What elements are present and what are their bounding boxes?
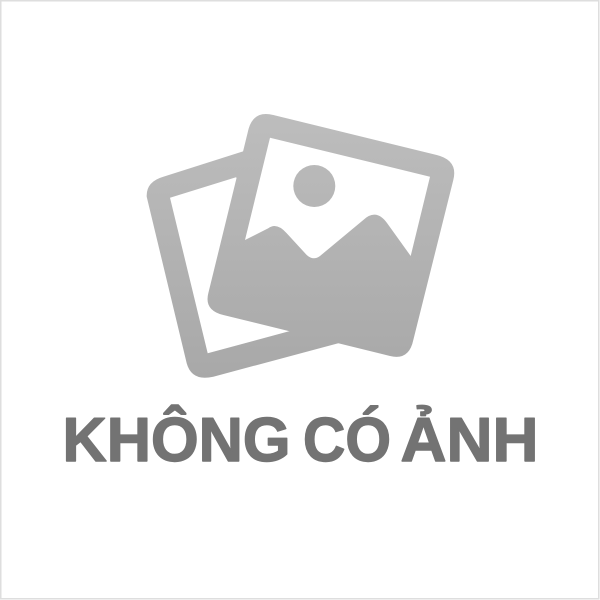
title: no image: CÓ [303,406,391,475]
icon: back photo frame [147,140,350,378]
title: no image: ẢNH [400,406,538,475]
icon: front photo frame with mountains and sun [208,114,454,357]
icon: photos [147,114,454,378]
title: no image: KHÔNG [62,406,290,475]
